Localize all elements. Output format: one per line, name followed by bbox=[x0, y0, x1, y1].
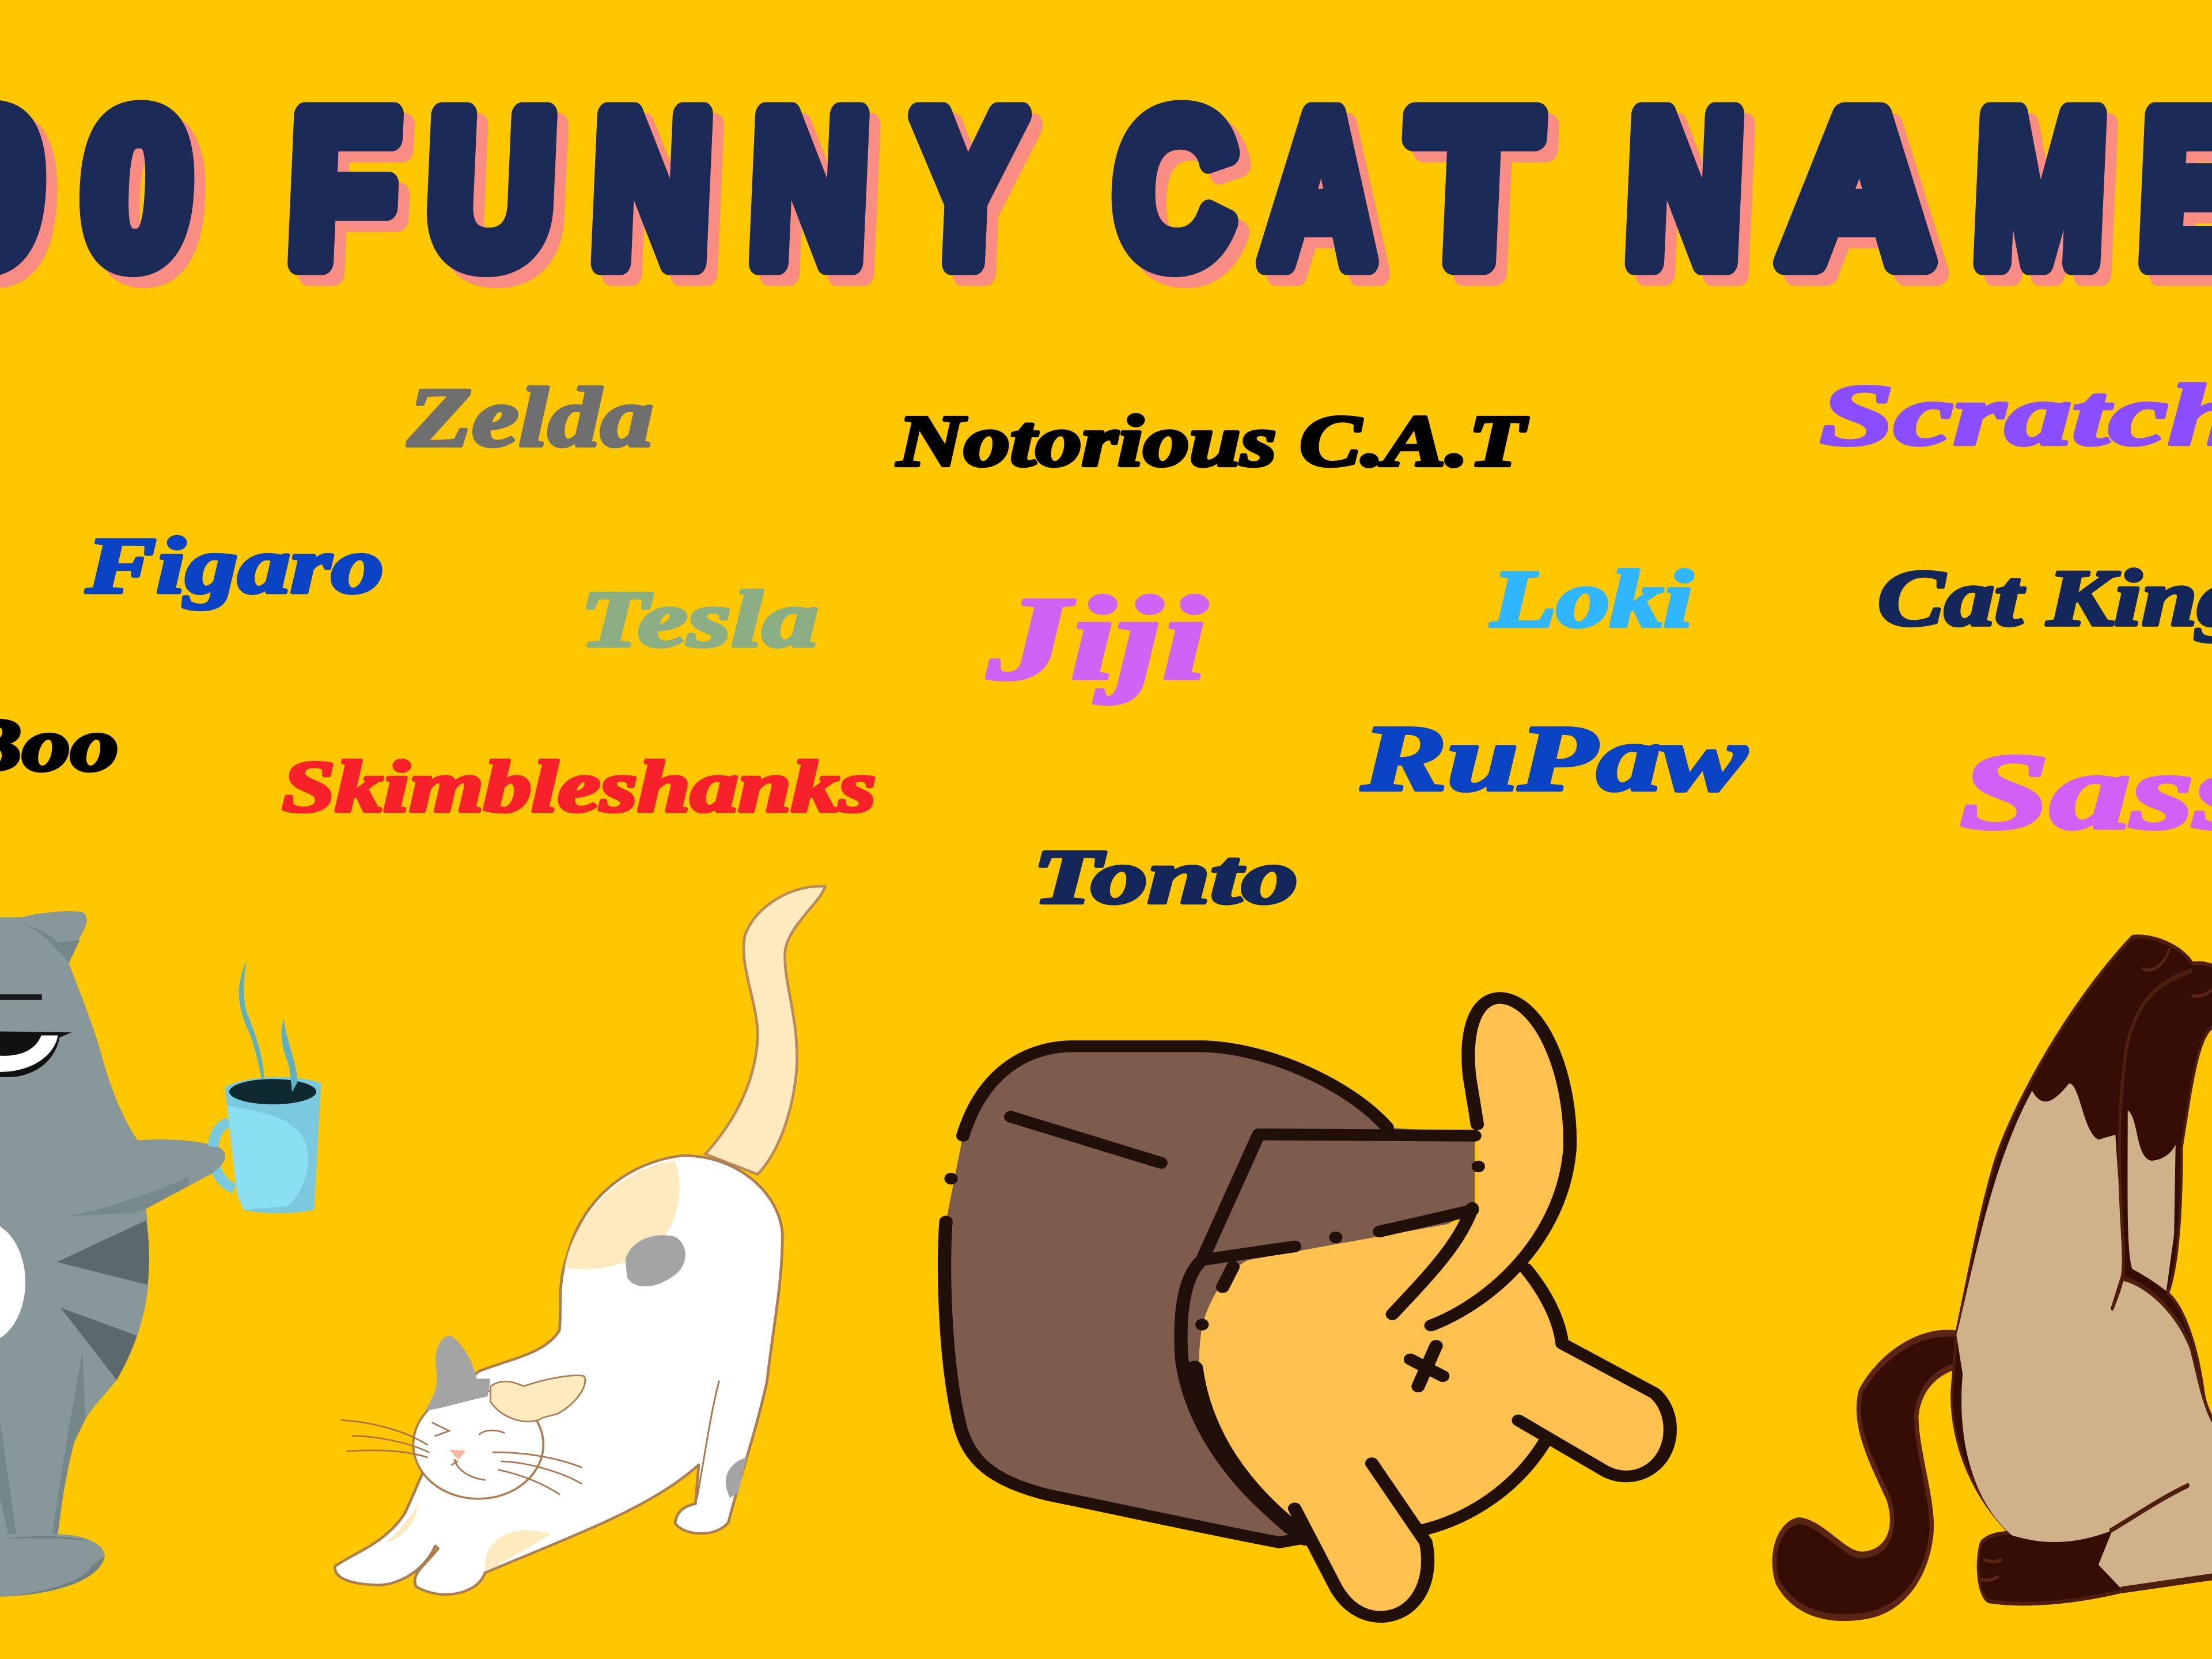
head bbox=[413, 1391, 543, 1499]
mug highlight bbox=[227, 1105, 308, 1210]
flap fill bbox=[1202, 1134, 1475, 1260]
upper stripe bbox=[57, 1221, 149, 1285]
arm shading bbox=[66, 1163, 221, 1217]
box and cat outlines bbox=[945, 998, 1670, 1617]
title: A bbox=[1259, 69, 1382, 308]
cat names bbox=[0, 366, 2212, 920]
coffee bbox=[229, 1079, 316, 1104]
title: Y bbox=[906, 69, 1027, 308]
name: Loki: Loki bbox=[1490, 553, 1693, 644]
cream ear patch bbox=[490, 1376, 585, 1422]
name: Tonto: Tonto bbox=[1033, 834, 1298, 920]
title: F bbox=[284, 69, 402, 308]
title bbox=[0, 69, 2212, 308]
name: Jiji: Jiji bbox=[987, 573, 1207, 705]
leg shading bbox=[0, 1351, 85, 1534]
white belly bbox=[0, 1221, 25, 1343]
face bbox=[342, 1381, 719, 1498]
mug body bbox=[225, 1077, 321, 1213]
name: RuPaw: RuPaw bbox=[1361, 706, 1747, 810]
tail bbox=[705, 886, 825, 1175]
body contour lines bbox=[2111, 971, 2212, 1589]
gray cat body bbox=[0, 910, 225, 1597]
coffee mug bbox=[213, 960, 321, 1213]
title: T bbox=[1404, 69, 1540, 308]
lower stripe bbox=[60, 1308, 137, 1380]
name: Zelda: Zelda bbox=[407, 370, 653, 464]
steam bbox=[239, 960, 298, 1092]
title: N bbox=[745, 69, 873, 308]
toes bbox=[1981, 949, 2212, 1580]
eyebrow bbox=[0, 994, 42, 1000]
name: Sassy: Sassy bbox=[1960, 732, 2212, 852]
dark silhouette bbox=[1952, 937, 2212, 1604]
title: N bbox=[1622, 69, 1748, 308]
ear shading bbox=[14, 921, 80, 963]
gray leg spot bbox=[726, 1457, 747, 1498]
name: Cat King: Cat King bbox=[1878, 554, 2212, 643]
title: C bbox=[1109, 69, 1240, 308]
gray back spot bbox=[626, 1235, 685, 1286]
title: U bbox=[422, 69, 560, 308]
title: M bbox=[1970, 69, 2110, 308]
mug handle bbox=[213, 1123, 234, 1188]
cat body bbox=[335, 1156, 782, 1594]
gray head patch and ear bbox=[425, 1335, 490, 1411]
illustration: siamese cat bbox=[1774, 937, 2212, 1618]
title: A bbox=[1778, 69, 1940, 308]
tan body bbox=[1956, 1084, 2212, 1589]
tail bbox=[1392, 998, 1570, 1325]
title: 0 bbox=[78, 69, 196, 308]
cream back patch bbox=[565, 1161, 680, 1269]
tan front leg bbox=[2127, 1110, 2176, 1291]
illustration: gray cat with coffee bbox=[0, 910, 321, 1597]
illustration: stretching calico cat bbox=[335, 886, 825, 1594]
name: Notorious C.A.T: Notorious C.A.T bbox=[896, 400, 1528, 482]
outline dots bbox=[944, 1161, 1485, 1331]
cat body and legs bbox=[1199, 1222, 1670, 1617]
box fill bbox=[945, 1046, 1475, 1543]
tail bbox=[1774, 1333, 1963, 1618]
illustration: cat in a box bbox=[944, 998, 1670, 1617]
foot shading bbox=[0, 1536, 105, 1597]
title: N bbox=[588, 69, 717, 308]
paw on mug bbox=[187, 1144, 225, 1186]
cream leg patch bbox=[386, 1503, 551, 1571]
name: Skimbleshanks: Skimbleshanks bbox=[282, 746, 876, 827]
sleepy eye bbox=[0, 1031, 71, 1077]
nose bbox=[449, 1450, 465, 1460]
name: Tesla: Tesla bbox=[580, 575, 818, 664]
name: Scratchmo: Scratchmo bbox=[1820, 366, 2212, 463]
name: Figaro: Figaro bbox=[85, 522, 384, 611]
